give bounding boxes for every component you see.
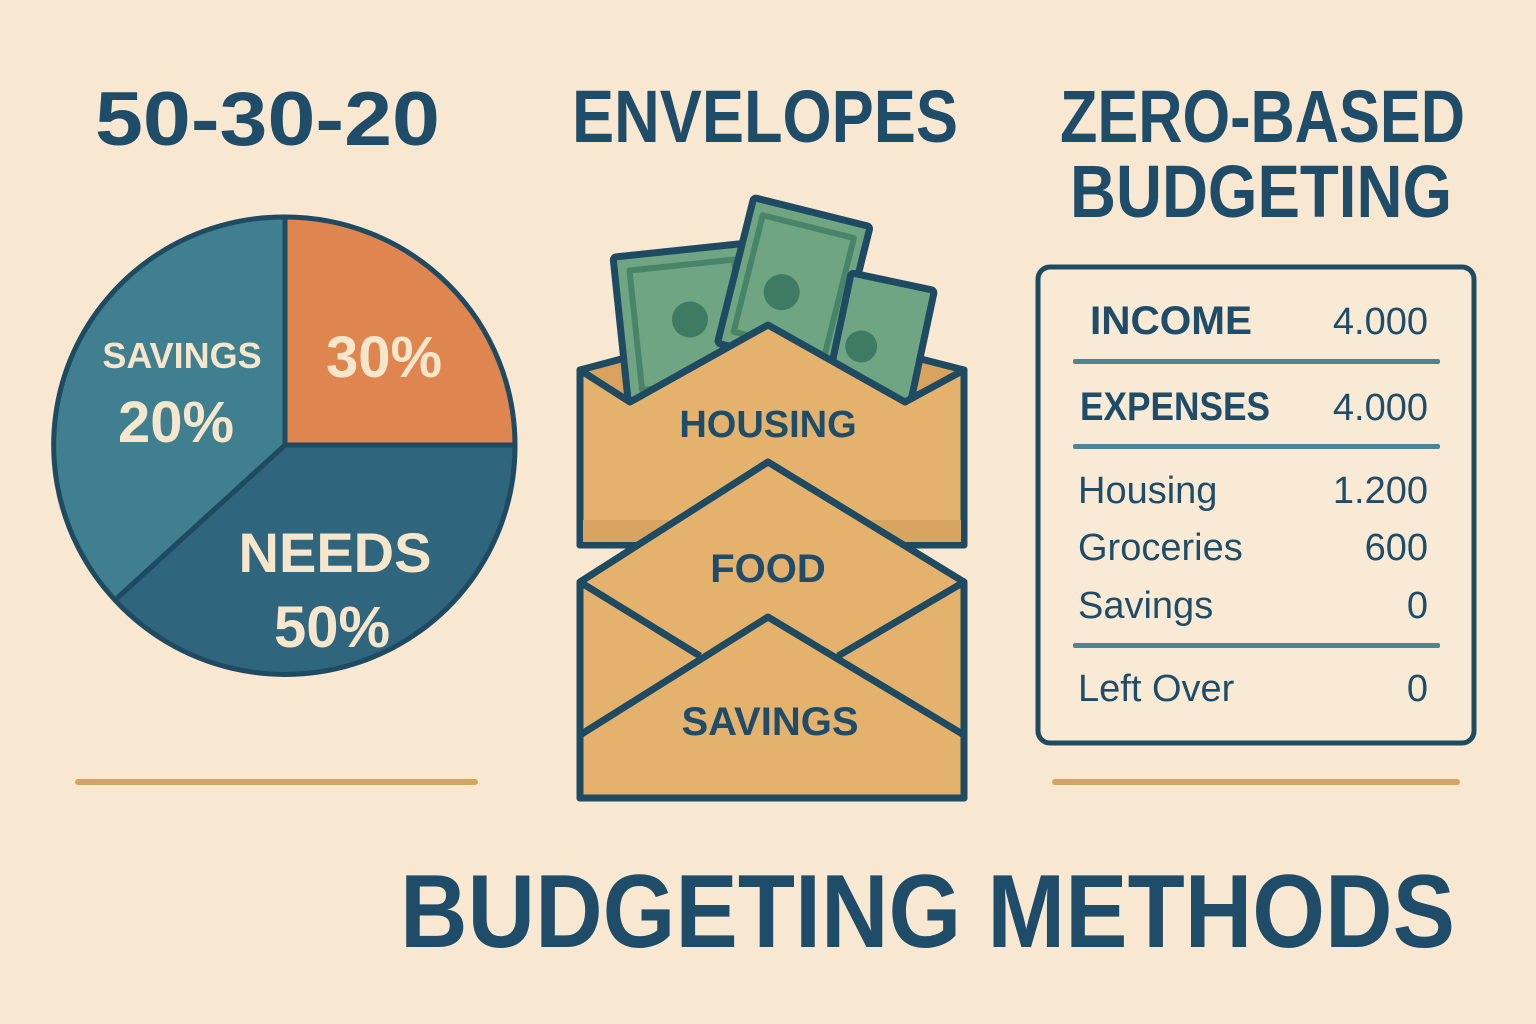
envelope: housing bbox=[580, 325, 964, 545]
title: zero-based budgeting: ZERO-BASED bbox=[1060, 75, 1465, 158]
zero-based table: Left Over bbox=[1078, 668, 1235, 710]
bills bbox=[613, 198, 934, 408]
underline left bbox=[75, 779, 478, 785]
zero-based table: Savings bbox=[1078, 585, 1213, 627]
envelopes illustration: SAVINGS bbox=[681, 700, 859, 744]
title: zero-based budgeting bbox=[1060, 75, 1465, 233]
pie chart: 30% bbox=[326, 325, 442, 390]
envelope: savings bbox=[580, 617, 964, 798]
envelopes illustration: HOUSING bbox=[679, 404, 857, 446]
pie chart: SAVINGS bbox=[102, 335, 262, 376]
title: envelopes: ENVELOPES bbox=[572, 75, 958, 158]
pie chart: NEEDS bbox=[239, 521, 431, 584]
zero-based table: Groceries bbox=[1078, 527, 1243, 569]
zero-based table: 1.200 bbox=[1333, 470, 1428, 512]
pie chart bbox=[54, 217, 515, 674]
title: zero-based budgeting: BUDGETING bbox=[1070, 150, 1452, 233]
envelope back bbox=[580, 320, 964, 545]
zero-based table: 4.000 bbox=[1333, 301, 1428, 343]
zero-based table: EXPENSES bbox=[1080, 385, 1270, 429]
zero-based table: 4.000 bbox=[1333, 387, 1428, 429]
zero-based table: 0 bbox=[1407, 668, 1428, 710]
zero-based table: Housing bbox=[1078, 470, 1217, 512]
envelope: food bbox=[580, 462, 964, 798]
underline right bbox=[1052, 779, 1460, 785]
zero-based table bbox=[1038, 267, 1474, 743]
zero-based table: 0 bbox=[1407, 585, 1428, 627]
envelopes illustration: FOOD bbox=[710, 547, 826, 591]
envelopes illustration bbox=[580, 198, 964, 798]
title: 50-30-20: 50-30-20 bbox=[95, 77, 440, 162]
pie chart: 20% bbox=[118, 390, 234, 455]
pie chart: 50% bbox=[274, 595, 390, 660]
zero-based table: INCOME bbox=[1090, 299, 1252, 343]
zero-based table: 600 bbox=[1365, 527, 1428, 569]
